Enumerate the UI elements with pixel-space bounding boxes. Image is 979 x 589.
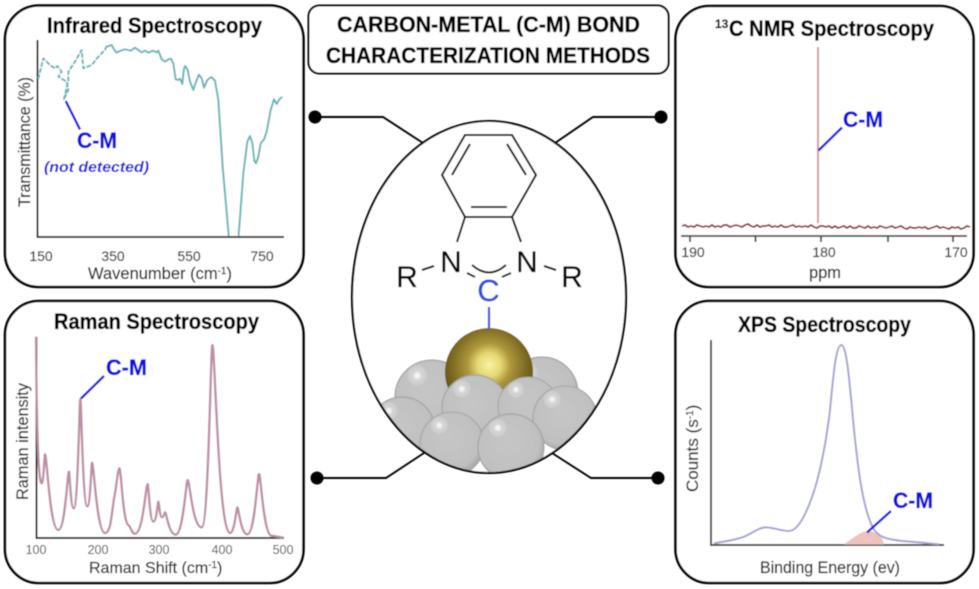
gold atom [444, 327, 534, 390]
panel: raman spectroscopy [5, 301, 304, 583]
panel: infrared spectroscopy [5, 6, 304, 287]
infrared axes [38, 40, 284, 237]
central egg: NHC molecule on metal [352, 121, 626, 480]
benzimidazolylidene structure [422, 135, 556, 277]
NMR axis with ticks [681, 236, 967, 242]
panel: XPS spectroscopy [676, 301, 974, 583]
x axis label: ppm [809, 264, 841, 282]
C-M callout line [818, 128, 842, 150]
XPS axes [711, 340, 944, 545]
atom labels: R [396, 261, 418, 294]
x axis label: ) [226, 265, 232, 283]
tick labels: 180 [812, 244, 836, 260]
tick labels: 150 [29, 248, 53, 264]
carbon-metal bond [488, 307, 490, 329]
tick labels: 550 [177, 248, 201, 264]
title box [308, 6, 668, 74]
y axis label: -1 [685, 410, 696, 419]
tick labels [29, 248, 274, 264]
y axis label: Counts (s [683, 419, 702, 492]
NMR baseline noise [682, 224, 970, 229]
connector: top left [308, 110, 423, 143]
C-M label: C-M [893, 488, 933, 513]
heading: infrared: Infrared Spectroscopy [47, 13, 263, 38]
infrared spectrum [38, 45, 282, 235]
tick labels [26, 543, 293, 557]
y axis label: ) [683, 405, 702, 410]
atom labels: R [561, 261, 583, 294]
title box: CARBON-METAL (C-M) BOND [337, 12, 640, 37]
tick labels: 100 [26, 543, 46, 557]
y axis label: Raman intensity [14, 382, 32, 500]
not detected note: (not detected) [44, 159, 149, 176]
connectors [308, 110, 668, 484]
tick labels: 200 [88, 543, 108, 557]
tick labels: 400 [212, 543, 232, 557]
x axis label: Wavenumber (cm [88, 265, 218, 283]
x axis label: Raman Shift (cm [89, 560, 208, 577]
heading: NMR: 13 [715, 17, 729, 31]
tick labels: 190 [681, 244, 705, 260]
raman spectrum [36, 337, 283, 538]
C-M callout line [81, 376, 104, 398]
x axis label: Binding Energy (ev) [760, 559, 900, 577]
C-M callout line [867, 511, 891, 532]
C-M label: C-M [843, 107, 883, 132]
heading: XPS: XPS Spectroscopy [738, 312, 912, 337]
atom labels [396, 246, 583, 294]
tick labels: 170 [944, 244, 968, 260]
tick labels: 500 [273, 543, 293, 557]
metal surface spheres [369, 328, 597, 480]
NMR peak [817, 47, 819, 223]
tick labels: 350 [101, 248, 125, 264]
atom labels: N [516, 246, 538, 279]
x axis label: -1 [208, 560, 217, 571]
x axis label: ) [217, 560, 222, 577]
title box: CHARACTERIZATION METHODS [326, 43, 650, 68]
connector: bottom left [310, 453, 424, 484]
XPS C-M shaded peak [844, 531, 884, 544]
C-M label: C-M [106, 355, 147, 380]
heading: NMR: C NMR Spectroscopy [729, 16, 935, 41]
C-M label: C-M [77, 128, 117, 153]
tick labels [681, 244, 968, 260]
heading: raman: Raman Spectroscopy [54, 309, 260, 334]
connector: bottom right [552, 453, 664, 484]
x axis label: -1 [218, 266, 227, 277]
tick labels: 750 [250, 248, 274, 264]
panel: 13C NMR spectroscopy [676, 6, 974, 287]
y axis label: Transmittance (%) [16, 77, 34, 207]
tick labels: 300 [149, 543, 169, 557]
XPS spectrum [714, 345, 939, 544]
C-M callout line [66, 101, 80, 130]
raman axes [36, 337, 284, 538]
connector: top right [555, 110, 668, 143]
carbene carbon: C [477, 273, 500, 308]
atom labels: N [440, 246, 462, 279]
egg outline [352, 121, 626, 473]
